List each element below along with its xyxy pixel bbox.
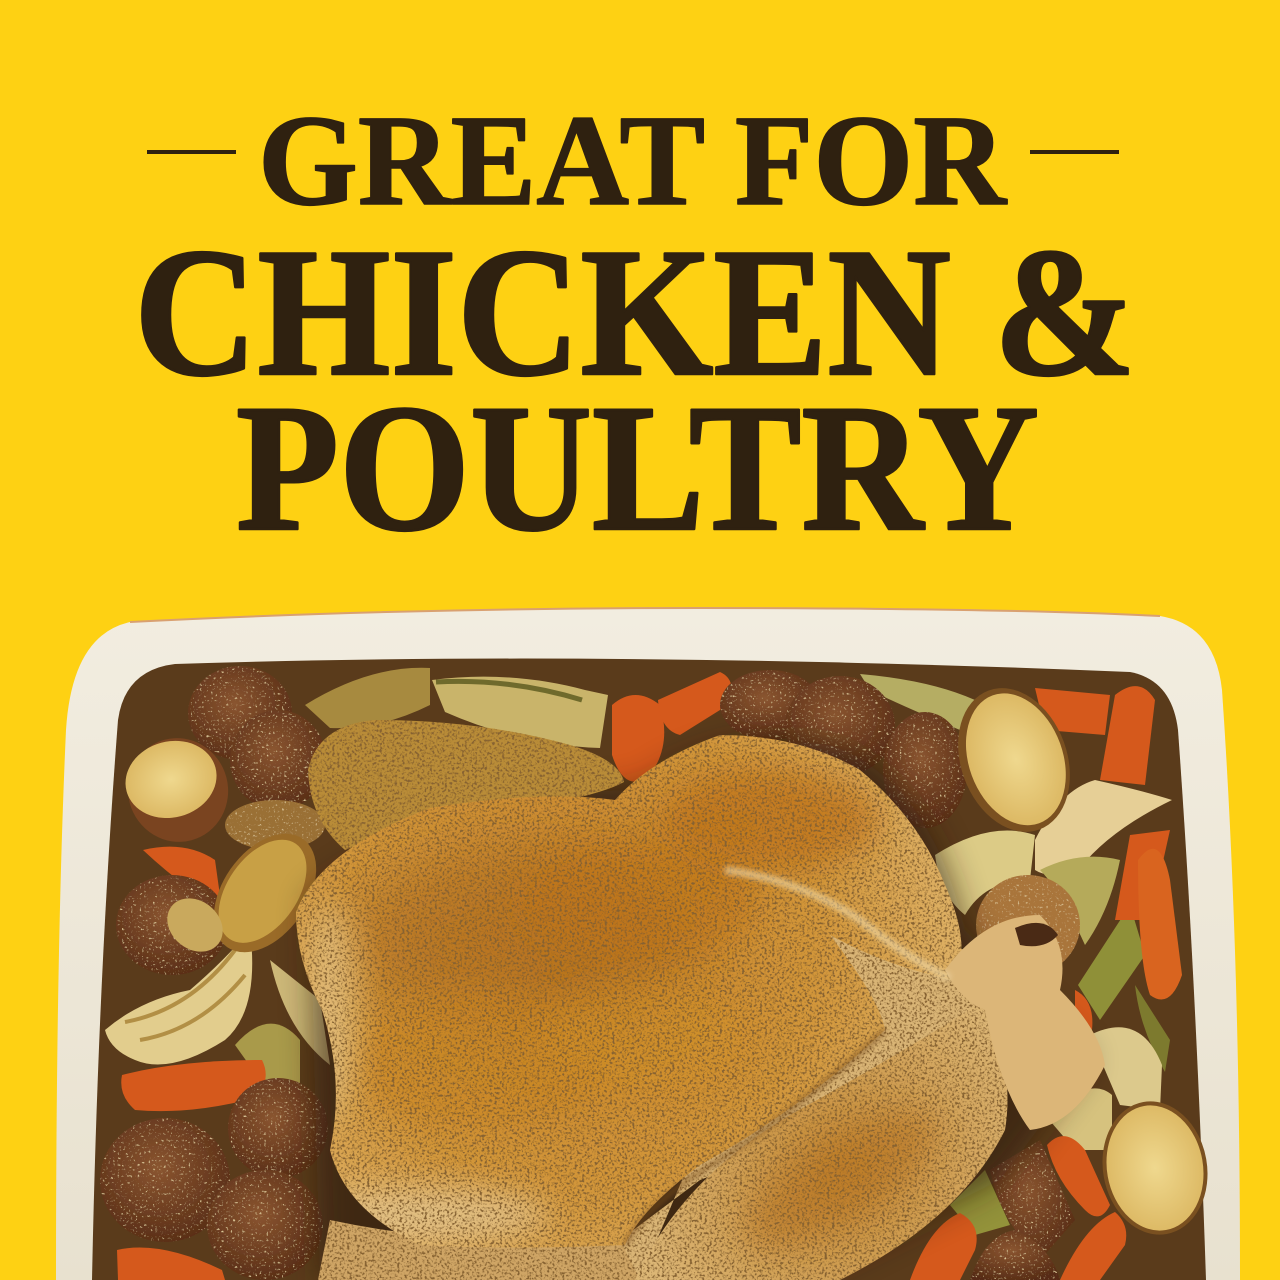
leg colour patch [726,1088,954,1272]
upper wing [308,720,624,850]
lower flap [318,1220,638,1280]
heading line: Great for: GREAT FOR [258,89,1008,233]
main body [296,735,962,1248]
vegetables: cut potatoes [116,672,1216,1241]
breast colour patches [302,770,880,1243]
thigh and leg [635,1000,1008,1280]
pale base between breast and leg [620,900,990,1280]
chicken shadow [310,742,1090,1280]
drumstick end [945,915,1105,1130]
crease between breast and wing [725,870,950,978]
drumstick bone tip [1015,923,1058,946]
baking dish [56,608,1240,1280]
heading: decorative rule right [1030,150,1119,154]
heading: decorative rule left [147,150,236,154]
vegetables: red potatoes [100,666,1080,1280]
vegetables: fennel and onion [105,668,1172,1235]
chicken skin: seasoned [296,720,1008,1280]
heading line: Poultry: POULTRY [236,368,1039,569]
roast chicken [296,720,1105,1280]
vegetables: carrots [117,672,1182,1280]
heading line: Chicken &: CHICKEN & [134,210,1136,414]
crease between body and leg [625,1030,885,1245]
